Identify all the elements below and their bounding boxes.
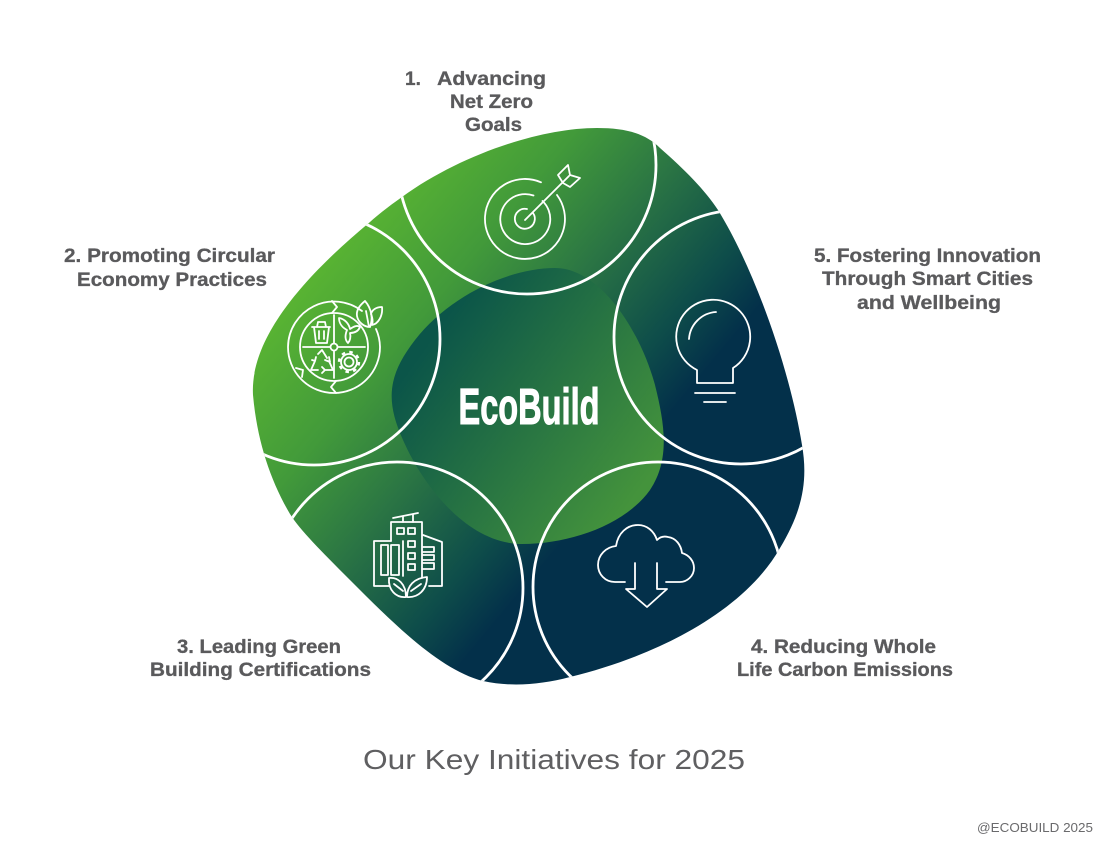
label 5: Fostering Innovation Through Smart Cities and Wellbeing: 5. Fostering Innovation xyxy=(814,246,1041,267)
left block xyxy=(374,541,403,586)
label 4: Reducing Whole Life Carbon Emissions xyxy=(737,637,953,681)
label 1: Advancing Net Zero Goals: Advancing xyxy=(437,69,546,90)
right block xyxy=(423,535,442,586)
icon: target with arrow xyxy=(485,165,580,259)
label 3: Leading Green Building Certifications xyxy=(150,637,371,681)
ring with arrows xyxy=(288,301,380,393)
gear xyxy=(344,358,354,366)
icon: light bulb xyxy=(676,300,750,402)
turbine xyxy=(339,318,360,343)
recycle xyxy=(311,350,333,373)
label 2: Promoting Circular Economy Practices xyxy=(64,246,276,291)
label 4: Reducing Whole Life Carbon Emissions: 4. Reducing Whole xyxy=(751,637,936,658)
label 4: Reducing Whole Life Carbon Emissions: Life Carbon Emissions xyxy=(737,660,953,681)
label 3: Leading Green Building Certifications: Building Certifications xyxy=(150,660,371,681)
label 2: Promoting Circular Economy Practices: 2. Promoting Circular xyxy=(64,246,276,267)
footer credit: @ECOBUILD 2025 xyxy=(977,820,1093,835)
cross lines xyxy=(303,315,365,378)
label 5: Fostering Innovation Through Smart Cities and Wellbeing: and Wellbeing xyxy=(857,293,1001,314)
circle segment outlines xyxy=(264,142,803,682)
leaves xyxy=(357,301,372,327)
icon: cloud with down arrow xyxy=(598,525,694,607)
title: Our Key Initiatives for 2025 xyxy=(363,744,745,775)
trash xyxy=(312,322,330,343)
label 1: Advancing Net Zero Goals xyxy=(405,69,546,136)
outer blob shape xyxy=(253,128,804,684)
label 3: Leading Green Building Certifications: 3. Leading Green xyxy=(177,637,341,658)
icon: green building xyxy=(374,513,442,597)
outer blob diagram xyxy=(252,128,804,684)
label 5: Fostering Innovation Through Smart Cities and Wellbeing xyxy=(814,246,1041,314)
logo: EcoBuild: EcoBuild xyxy=(458,378,600,435)
icon: circular economy xyxy=(288,301,382,393)
inner blob xyxy=(392,268,664,544)
label 2: Promoting Circular Economy Practices: Economy Practices xyxy=(77,270,267,291)
label 5: Fostering Innovation Through Smart Cities and Wellbeing: Through Smart Cities xyxy=(822,269,1033,290)
leaves xyxy=(389,578,406,597)
label 1: Advancing Net Zero Goals: 1. xyxy=(405,69,421,90)
label 1: Advancing Net Zero Goals: Net Zero xyxy=(450,92,533,113)
label 1: Advancing Net Zero Goals: Goals xyxy=(465,115,522,136)
tower xyxy=(391,522,422,578)
